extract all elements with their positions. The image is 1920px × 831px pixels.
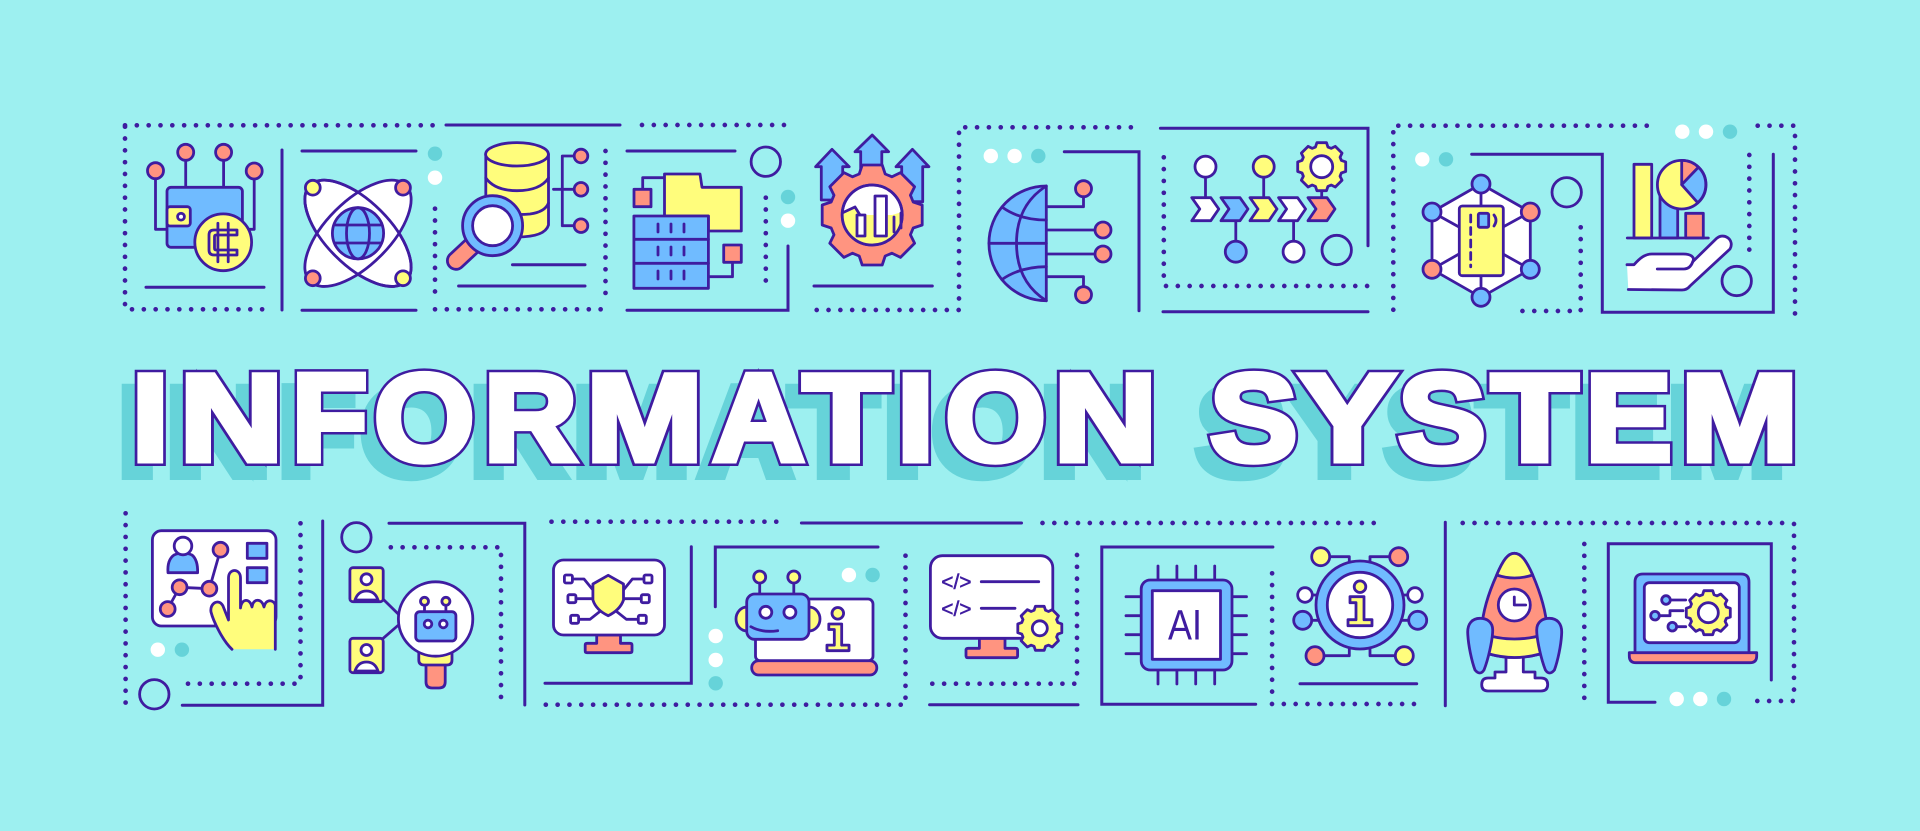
title: INFORMATION SYSTEM: T [1491,350,1578,488]
icon: credit card network [1423,175,1539,306]
title: INFORMATION SYSTEM: F [279,364,355,502]
icon: rocket launch [1468,553,1562,691]
title: INFORMATION SYSTEM: S [1398,350,1486,488]
icon: chatbot magnifier with users [350,568,473,688]
icon: folder and server [634,174,741,288]
title: INFORMATION SYSTEM: M [573,364,690,502]
icon: atom with globe [287,163,429,304]
title: INFORMATION SYSTEM: O [374,350,475,488]
icon: wallet with coin [148,144,262,271]
title: INFORMATION SYSTEM: T [1478,364,1565,502]
title: INFORMATION SYSTEM: A [712,350,805,488]
title: INFORMATION SYSTEM: R [484,350,577,488]
title: INFORMATION SYSTEM: O [374,350,475,488]
title: INFORMATION SYSTEM: S [1210,350,1298,488]
title: INFORMATION SYSTEM: M [586,350,703,488]
title: INFORMATION SYSTEM [119,350,1798,502]
title: INFORMATION SYSTEM: M [1681,350,1798,488]
icon: gear with growth arrows [816,135,929,265]
title: INFORMATION SYSTEM: R [484,350,577,488]
title: INFORMATION SYSTEM: Y [1299,350,1396,488]
icon: monitor with code and gear [930,556,1062,658]
title: INFORMATION SYSTEM: I [119,364,156,502]
title: INFORMATION SYSTEM: N [1054,350,1157,488]
icon: touchscreen graph [152,531,276,649]
title: INFORMATION SYSTEM: S [1398,350,1486,488]
title: INFORMATION SYSTEM: S [1197,364,1284,502]
icon: monitor with code and gear: </> [941,571,972,594]
title: INFORMATION SYSTEM: O [945,350,1046,488]
icon: robot on laptop with info [736,571,877,675]
title: INFORMATION SYSTEM: I [884,364,921,502]
title: INFORMATION SYSTEM: N [167,364,270,502]
icon: charts over open hand [1627,160,1731,290]
title: INFORMATION SYSTEM: O [932,364,1033,502]
title: INFORMATION SYSTEM: F [292,350,368,488]
title: INFORMATION SYSTEM: S [1385,364,1473,502]
title: INFORMATION SYSTEM: T [790,364,877,502]
title: INFORMATION SYSTEM: T [803,350,890,488]
title: INFORMATION SYSTEM: Y [1286,364,1383,502]
title: INFORMATION SYSTEM: O [945,350,1046,488]
title: INFORMATION SYSTEM: O [361,364,462,502]
title: INFORMATION SYSTEM: S [1210,350,1298,488]
icon: half globe network [989,181,1111,303]
icon: AI chip: AI [1168,602,1202,650]
title: INFORMATION SYSTEM: A [712,350,805,488]
title: INFORMATION SYSTEM: T [1491,350,1578,488]
title: INFORMATION SYSTEM: I [132,350,169,488]
title: INFORMATION SYSTEM: E [1572,364,1659,502]
icon: AI chip [1126,566,1246,684]
title: INFORMATION SYSTEM: I [897,350,934,488]
title: INFORMATION SYSTEM: E [1585,350,1672,488]
title: INFORMATION SYSTEM: I [897,350,934,488]
title: INFORMATION SYSTEM: F [292,350,368,488]
icon: laptop with settings gear [1629,574,1757,663]
title: INFORMATION SYSTEM: E [1585,350,1672,488]
title: INFORMATION SYSTEM: A [700,364,792,502]
title: INFORMATION SYSTEM: R [471,364,564,502]
title: INFORMATION SYSTEM: M [1668,364,1785,502]
icon: process chevrons with gear [1192,143,1346,262]
icon: monitor with code and gear: </> [941,598,972,621]
title: INFORMATION SYSTEM: T [803,350,890,488]
icon: database search [456,143,588,261]
title: INFORMATION SYSTEM: M [1681,350,1798,488]
title: INFORMATION SYSTEM: Y [1299,350,1396,488]
title: INFORMATION SYSTEM: I [132,350,169,488]
title: INFORMATION SYSTEM: M [586,350,703,488]
title: INFORMATION SYSTEM: N [180,350,283,488]
title: INFORMATION SYSTEM: N [180,350,283,488]
icon: monitor with security shield [554,560,664,653]
title: INFORMATION SYSTEM: N [1054,350,1157,488]
title: INFORMATION SYSTEM: N [1041,364,1144,502]
icon: information hub [1294,548,1427,665]
